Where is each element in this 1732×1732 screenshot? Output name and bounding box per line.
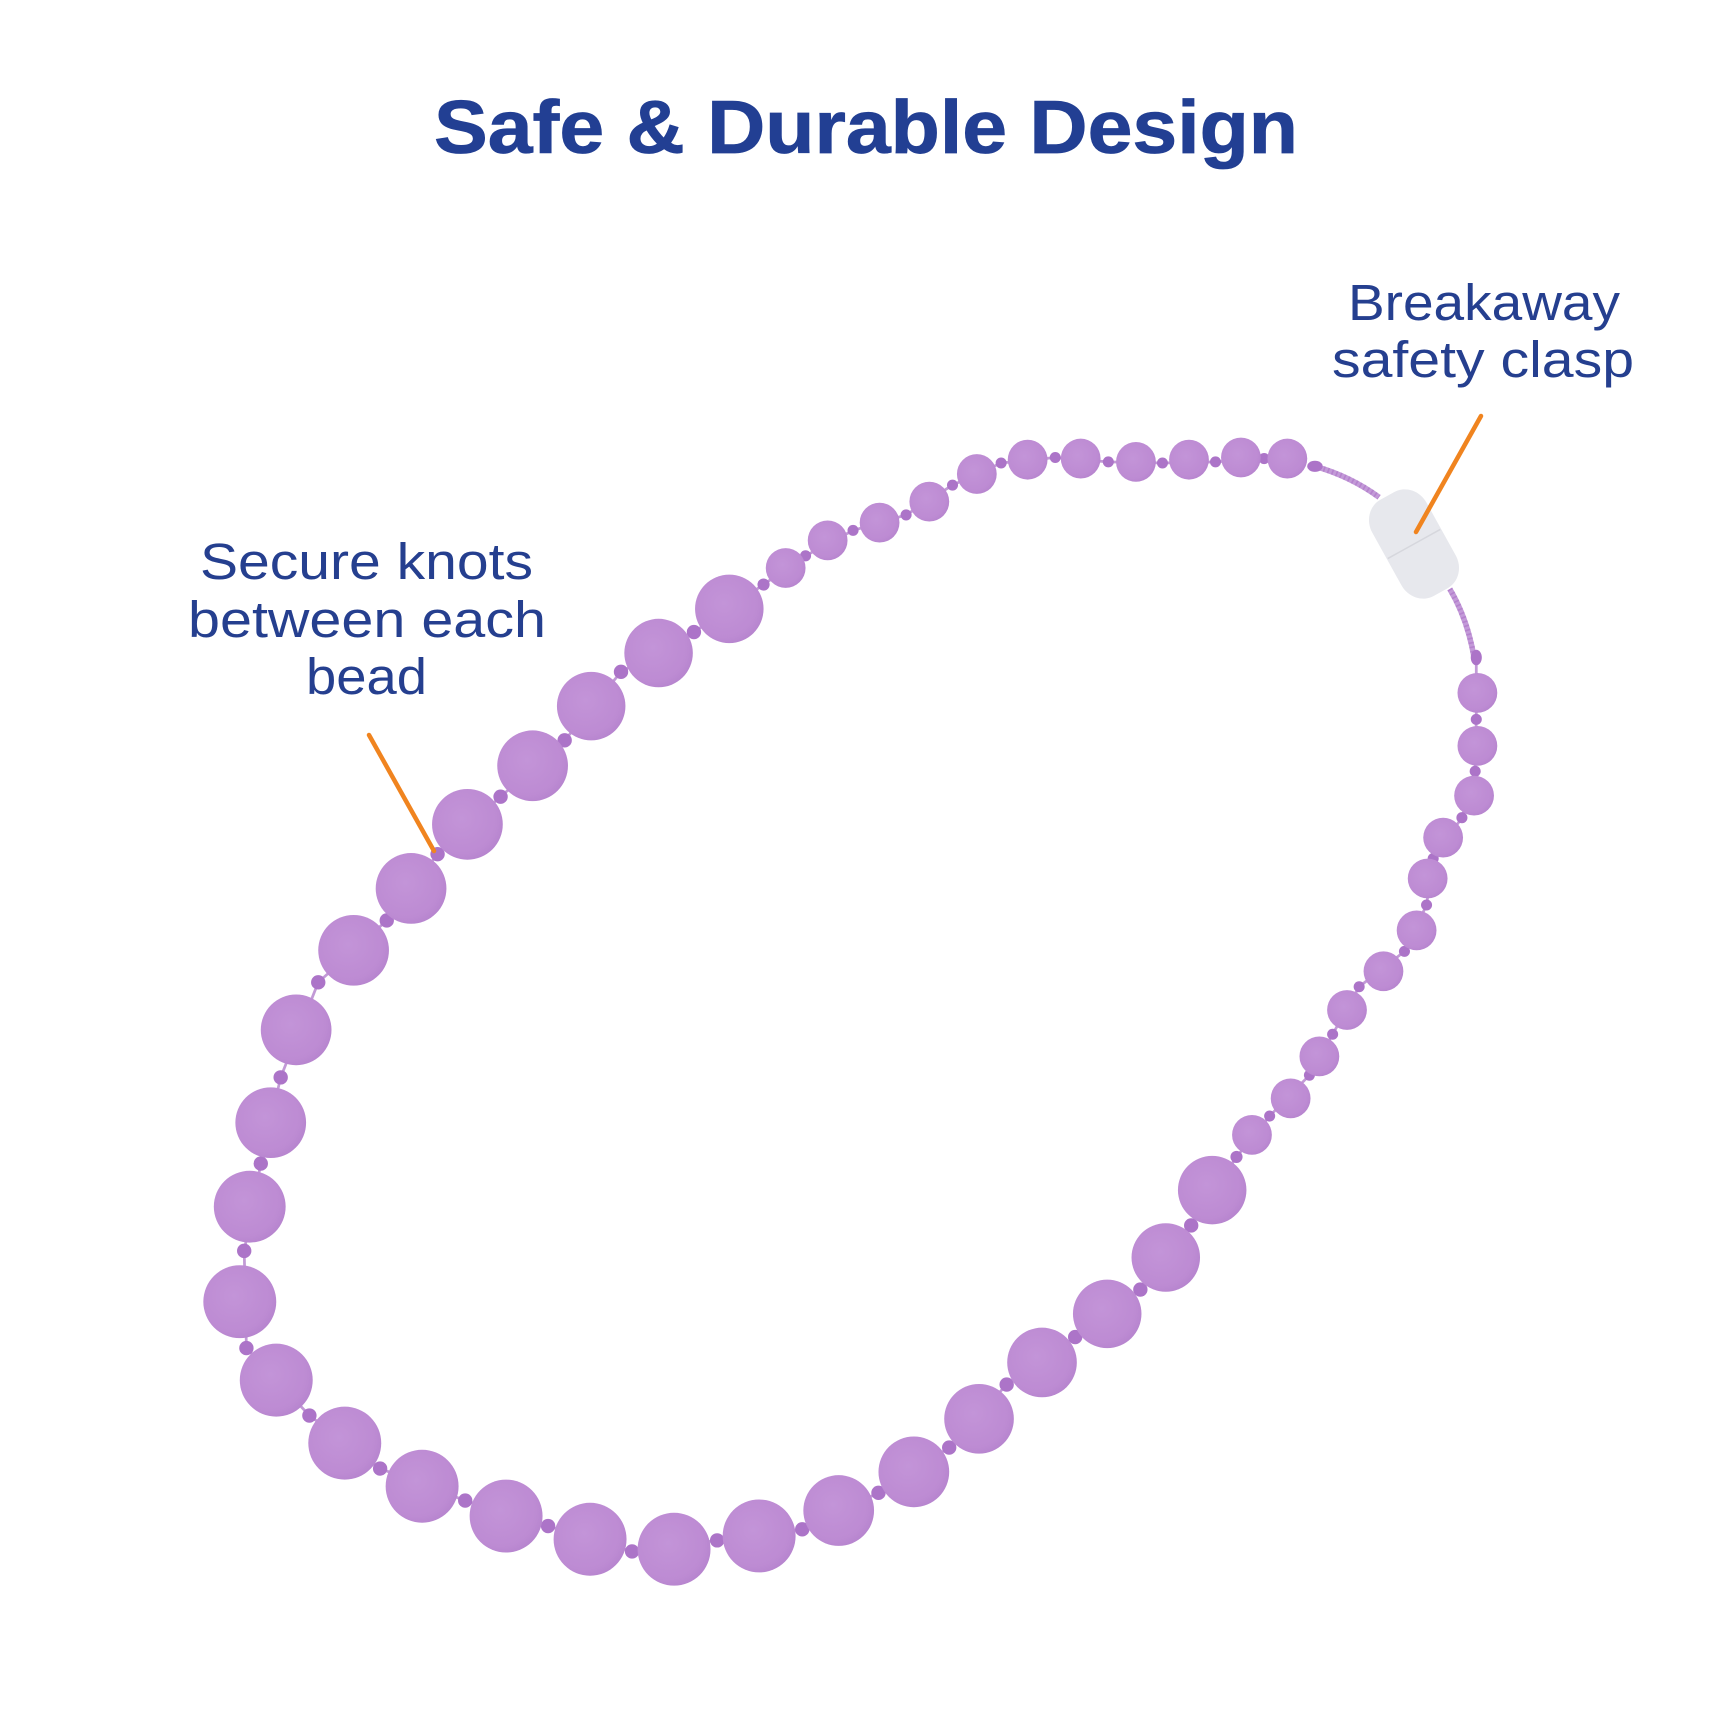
- callout: secure knots: bead: [306, 648, 427, 705]
- arrow: clasp pointer: [1416, 416, 1481, 532]
- callout: secure knots: [188, 533, 546, 705]
- beads: [203, 438, 1497, 1586]
- knots: [237, 452, 1482, 1559]
- arrow: knot pointer: [369, 735, 434, 851]
- necklace: [203, 438, 1497, 1586]
- title: Safe & Durable Design: [434, 85, 1298, 169]
- cord: [244, 457, 1476, 1551]
- callout: secure knots: Secure knots: [200, 533, 533, 590]
- callout: breakaway safety clasp: safety clasp: [1332, 331, 1634, 388]
- clasp cords: [1315, 466, 1474, 657]
- callout: breakaway safety clasp: Breakaway: [1348, 274, 1621, 331]
- callout: secure knots: between each: [188, 591, 546, 648]
- callout: breakaway safety clasp: [1332, 274, 1634, 388]
- breakaway clasp: [1360, 481, 1468, 607]
